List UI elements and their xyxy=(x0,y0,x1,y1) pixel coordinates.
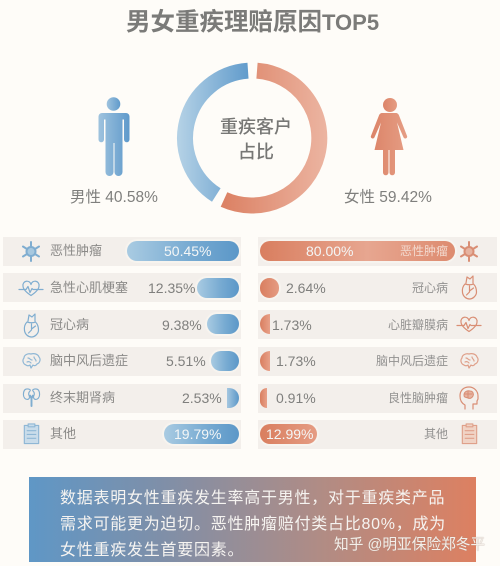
title: 男女重疾理赔原因TOP5 xyxy=(126,9,379,36)
row: benign brain tumour female: 0.91% xyxy=(276,390,316,406)
donut centre label: 占比 xyxy=(238,142,274,162)
icon: heart pulse xyxy=(18,280,44,296)
row: stroke sequelae male: 脑中风后遗症 xyxy=(50,353,128,368)
donut centre label: 重疾客户 xyxy=(220,117,292,137)
row: end-stage renal male xyxy=(3,384,241,413)
panel: conclusion text xyxy=(29,477,476,562)
row: benign brain tumour female xyxy=(258,384,497,413)
icon: virus xyxy=(460,241,478,262)
watermark: 知乎 @明亚保险郑冬平 xyxy=(334,537,485,553)
row: other male xyxy=(3,420,241,449)
row: coronary male: 冠心病 xyxy=(50,317,89,332)
donut centre label xyxy=(220,117,292,162)
icon: kidneys xyxy=(22,388,40,407)
row: end-stage renal male: 2.53% xyxy=(182,390,222,406)
row: stroke sequelae male xyxy=(3,347,241,376)
icon: anatomical heart xyxy=(24,314,40,338)
row: other female: 12.99% xyxy=(266,426,313,442)
conclusion paragraph xyxy=(60,489,446,559)
row: other female: 其他 xyxy=(424,427,448,441)
icon: female figure xyxy=(370,98,408,176)
icon: heart pulse xyxy=(456,316,482,332)
row: coronary female xyxy=(258,273,497,302)
icon: clipboard xyxy=(462,423,478,444)
row: valvular disease female xyxy=(258,310,497,339)
conclusion paragraph: 需求可能更为迫切。恶性肿瘤赔付类占比80%，成为 xyxy=(60,516,446,533)
male share label: 男性 40.58% xyxy=(70,189,158,206)
panel: female causes xyxy=(258,237,497,449)
conclusion paragraph: 数据表明女性重疾发生率高于男性，对于重疾类产品 xyxy=(60,490,445,507)
row: end-stage renal male: 终末期肾病 xyxy=(50,390,115,405)
row: malignant tumour female xyxy=(258,237,497,266)
row: malignant tumour female: 80.00% xyxy=(306,243,353,259)
female share label: 女性 59.42% xyxy=(344,189,432,206)
row: malignant tumour male: 恶性肿瘤 xyxy=(50,243,102,258)
row: acute MI male: 12.35% xyxy=(148,280,195,296)
icon: male figure xyxy=(98,97,130,176)
icon: clipboard xyxy=(24,423,40,444)
conclusion paragraph: 女性重疾发生首要因素。 xyxy=(60,542,244,559)
row: valvular disease female: 心脏瓣膜病 xyxy=(388,318,448,332)
icon: anatomical heart xyxy=(462,276,478,300)
row: stroke sequelae female: 1.73% xyxy=(276,353,316,369)
icon: virus xyxy=(22,241,40,262)
row: stroke sequelae male: 5.51% xyxy=(166,353,206,369)
row: malignant tumour female: 恶性肿瘤 xyxy=(400,244,448,258)
row: malignant tumour male xyxy=(3,237,241,266)
row: other male: 19.79% xyxy=(174,426,221,442)
row: other male: 其他 xyxy=(50,426,76,441)
donut chart: customer share xyxy=(177,62,328,214)
row: valvular disease female: 1.73% xyxy=(272,317,312,333)
row: acute MI male: 急性心肌梗塞 xyxy=(50,280,128,295)
row: coronary female: 2.64% xyxy=(286,280,326,296)
icon: brain xyxy=(460,353,479,369)
row: acute MI male xyxy=(3,273,241,302)
row: coronary male: 9.38% xyxy=(162,317,202,333)
row: coronary female: 冠心病 xyxy=(412,281,448,295)
row: stroke sequelae female xyxy=(258,347,497,376)
icon: head with brain xyxy=(459,386,479,410)
panel: male causes xyxy=(3,237,241,449)
row: other female xyxy=(258,420,497,449)
row: coronary male xyxy=(3,310,241,339)
row: malignant tumour male: 50.45% xyxy=(164,243,211,259)
row: benign brain tumour female: 良性脑肿瘤 xyxy=(388,391,448,405)
icon: brain xyxy=(22,353,41,369)
row: stroke sequelae female: 脑中风后遗症 xyxy=(376,354,448,368)
